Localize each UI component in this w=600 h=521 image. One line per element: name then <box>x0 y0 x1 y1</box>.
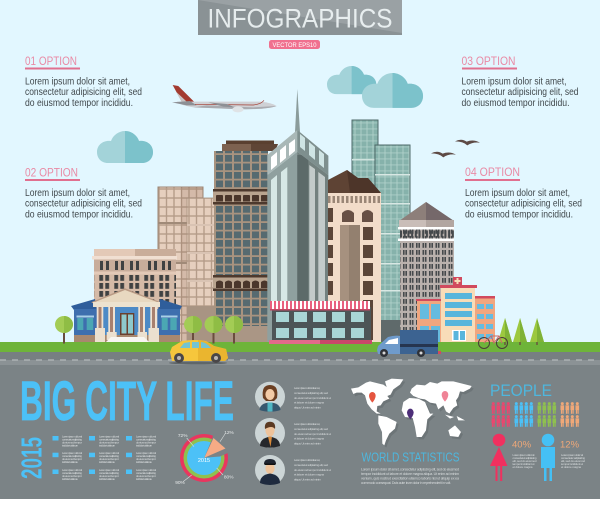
text grid: Lorem ipsum dolor sit <box>62 468 82 472</box>
heading: big city life: BIG CITY LIFE <box>20 369 234 432</box>
cloud upper right large <box>362 73 423 108</box>
text grid: Lorem ipsum dolor sit <box>99 468 119 472</box>
option 03: do eiusmod tempor incididu. <box>462 98 570 109</box>
text grid: incididunt ut labore <box>136 477 152 481</box>
museum <box>71 288 182 343</box>
avatar text blocks: aliqua. Ut enim ad minim <box>294 442 321 446</box>
option 03 <box>462 56 579 109</box>
beige building with brown roof <box>328 170 381 345</box>
shop with striped awning <box>269 301 372 344</box>
text grid: consectetur adipisicing <box>136 471 156 475</box>
heading: people: PEOPLE <box>490 381 552 400</box>
title banner: INFOGRAPHICS <box>208 4 392 34</box>
option 01: consectetur adipisicing elit, sed <box>25 87 142 98</box>
stat: 40 percent: elit, sed do eiusmod <box>512 459 537 463</box>
pine trees <box>498 318 544 345</box>
bicycle <box>478 336 508 348</box>
text grid: Lorem ipsum dolor sit <box>136 468 156 472</box>
option 02 <box>25 168 142 220</box>
world statistics paragraph: Lorem ipsum dolor sit amet, consectetur adipiscing elit, sed do eiusmod <box>361 468 459 472</box>
avatar text blocks: consectetur adipisicing elit, sed <box>294 391 328 395</box>
option 02: consectetur adipisicing elit, sed <box>25 198 142 210</box>
option 04: do eiusmod tempor incididu. <box>465 210 573 220</box>
bottom panel background <box>0 365 600 499</box>
world map <box>351 379 474 448</box>
text grid: incididunt ut labore <box>99 460 115 464</box>
cloud left <box>97 131 153 163</box>
option 01: do eiusmod tempor incididu. <box>25 98 133 109</box>
avatar text blocks: do eiusmod tempor incididunt ut <box>294 396 331 400</box>
avatar text blocks: do eiusmod tempor incididunt ut <box>294 432 331 436</box>
text grid: incididunt ut labore <box>136 460 152 464</box>
birds <box>431 140 480 157</box>
text grid: do eiusmod tempor <box>62 474 82 478</box>
stat: 12 percent: consectetur adipisicing <box>561 456 585 460</box>
option 03: Lorem ipsum dolor sit amet, <box>462 76 566 88</box>
text grid: do eiusmod tempor <box>62 440 82 444</box>
stat: 12 percent <box>560 440 585 469</box>
text grid <box>52 434 156 481</box>
text grid: Lorem ipsum dolor sit <box>136 451 156 455</box>
option 02: 02 OPTION <box>25 168 78 180</box>
text grid: do eiusmod tempor <box>99 440 119 444</box>
text grid: consectetur adipisicing <box>99 454 119 458</box>
text grid: do eiusmod tempor <box>136 474 156 478</box>
pie chart: 90% <box>175 480 186 486</box>
text grid: consectetur adipisicing <box>99 438 119 442</box>
stat: 40 percent: consectetur adipisicing <box>512 456 537 460</box>
text grid: do eiusmod tempor <box>99 474 119 478</box>
stat: 12 percent: tempor incididunt ut <box>561 462 583 466</box>
text grid: incididunt ut labore <box>136 444 152 448</box>
text grid: do eiusmod tempor <box>136 457 156 461</box>
text grid: do eiusmod tempor <box>136 440 156 444</box>
cloud upper right small <box>327 66 376 94</box>
yellow car <box>169 340 228 364</box>
avatar text blocks: aliqua. Ut enim ad minim <box>294 406 321 410</box>
stat: 40 percent: 40% <box>512 440 532 450</box>
glass tower front <box>375 145 410 344</box>
pie chart: 72% <box>178 433 188 439</box>
year 2015 vertical: 2015 <box>16 437 48 479</box>
avatar text blocks: Lorem ipsum dolor sit amet, <box>294 458 320 462</box>
avatar text blocks: et labore et dolore magna <box>294 472 324 476</box>
icon: woman 40% <box>490 434 508 481</box>
heading: world statistics: WORLD STATISTICS <box>362 450 460 464</box>
option 03: consectetur adipisicing elit, sed <box>462 87 579 98</box>
option 01: Lorem ipsum dolor sit amet, <box>25 76 130 88</box>
stat: 40 percent: Lorem ipsum dolor sit <box>512 453 535 457</box>
text grid: Lorem ipsum dolor sit <box>99 451 119 455</box>
option 04 <box>465 167 582 220</box>
text grid: Lorem ipsum dolor sit <box>99 434 119 438</box>
people pictogram rows <box>492 402 579 427</box>
text grid: consectetur adipisicing <box>136 438 156 442</box>
road <box>0 352 600 365</box>
text grid: Lorem ipsum dolor sit <box>62 451 82 455</box>
stat: 12 percent: 12% <box>560 440 580 450</box>
stat: 40 percent <box>512 440 537 469</box>
pie chart: 2015 <box>198 458 210 464</box>
world statistics paragraph <box>361 468 459 485</box>
text grid: incididunt ut labore <box>62 444 78 448</box>
option 01 <box>25 56 142 109</box>
pie chart: 12% <box>224 430 235 436</box>
avatar text blocks: consectetur adipisicing elit, sed <box>294 427 328 431</box>
text grid: consectetur adipisicing <box>62 438 82 442</box>
avatar text blocks: do eiusmod tempor incididunt ut <box>294 468 331 472</box>
option 04: Lorem ipsum dolor sit amet, <box>465 188 570 199</box>
icon: man 12% <box>541 434 555 481</box>
glass tower back <box>352 120 378 345</box>
blue truck <box>377 330 441 357</box>
pie chart <box>175 430 235 486</box>
text grid: consectetur adipisicing <box>99 471 119 475</box>
avatar text blocks: Lorem ipsum dolor sit amet, <box>294 386 320 390</box>
option 02: do eiusmod tempor incididu. <box>25 210 133 220</box>
world statistics paragraph: tempor incididunt ut labore et dolore magna aliqua. Ut enim ad minim <box>361 472 459 476</box>
option 02: Lorem ipsum dolor sit amet, <box>25 188 130 199</box>
stat: 40 percent: tempor incididunt ut <box>512 462 535 466</box>
avatar: woman <box>255 382 285 412</box>
hospital <box>416 277 495 342</box>
central grey skyscraper <box>267 89 328 345</box>
text grid: do eiusmod tempor <box>99 457 119 461</box>
option 04: 04 OPTION <box>465 167 520 179</box>
trees <box>55 316 243 344</box>
option 01: 01 OPTION <box>25 56 77 68</box>
text grid: consectetur adipisicing <box>62 471 82 475</box>
option 03: 03 OPTION <box>462 56 516 68</box>
tan tower left <box>158 187 203 342</box>
text grid: do eiusmod tempor <box>62 457 82 461</box>
text grid: incididunt ut labore <box>99 444 115 448</box>
stat: 12 percent: Lorem ipsum dolor sit <box>561 453 583 457</box>
text grid: Lorem ipsum dolor sit <box>62 434 82 438</box>
grass <box>0 342 600 352</box>
text grid: incididunt ut labore <box>62 460 78 464</box>
world statistics paragraph: veniam, quis nostrud exercitation ullamco laboris nisi ut aliquip ex ea <box>361 476 459 480</box>
avatar text blocks <box>294 386 331 482</box>
world statistics paragraph: commodo consequat. Duis aute irure dolor in reprehenderit in volt. <box>361 481 451 485</box>
avatar: businessman <box>255 418 285 448</box>
grey apartment tower <box>398 202 454 333</box>
stat: 40 percent: et dolore magna <box>512 465 533 469</box>
tan tower right <box>187 198 215 344</box>
office block behind museum <box>92 249 177 344</box>
badge: vector eps10: VECTOR EPS10 <box>272 42 317 49</box>
stat: 12 percent: et dolore magna <box>561 465 581 469</box>
text grid: consectetur adipisicing <box>62 454 82 458</box>
stat: 12 percent: elit, sed do eiusmod <box>561 459 585 463</box>
avatar text blocks: consectetur adipisicing elit, sed <box>294 463 328 467</box>
pie chart: 80% <box>224 474 234 480</box>
avatar: police officer <box>255 455 285 485</box>
text grid: incididunt ut labore <box>62 477 78 481</box>
avatar text blocks: Lorem ipsum dolor sit amet, <box>294 422 320 426</box>
avatar text blocks: aliqua. Ut enim ad minim <box>294 478 321 482</box>
text grid: Lorem ipsum dolor sit <box>136 434 156 438</box>
dark brown tower <box>213 140 278 343</box>
avatar text blocks: et labore et dolore magna <box>294 400 324 404</box>
airplane <box>172 85 277 112</box>
text grid: consectetur adipisicing <box>136 454 156 458</box>
avatar text blocks: et labore et dolore magna <box>294 436 324 440</box>
text grid: incididunt ut labore <box>99 477 115 481</box>
sky background <box>0 0 600 366</box>
